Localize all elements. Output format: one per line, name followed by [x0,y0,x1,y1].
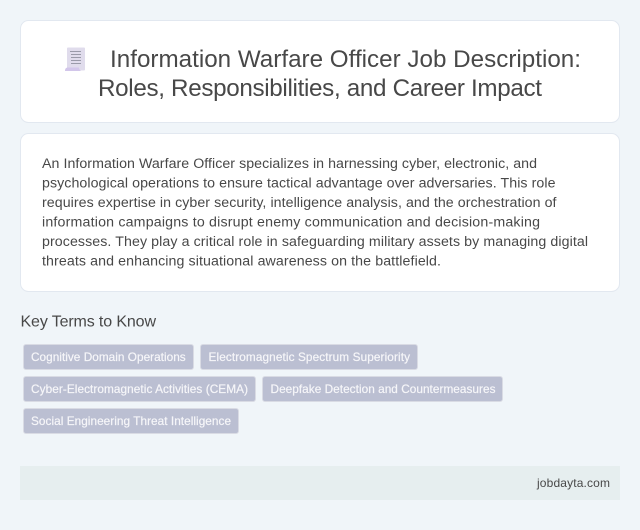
chip: electromagnetic spectrum superiority: Electromagnetic Spectrum Superiority [208,350,410,364]
heading: key terms: Key Terms to Know [20,314,156,331]
chip: cognitive domain operations [24,344,194,370]
chip: social engineering [24,408,238,434]
chip: deepfake detection: Deepfake Detection and Countermeasures [270,382,496,396]
chip: cema: Cyber-Electromagnetic Activities (CEMA) [31,382,248,396]
summary text block: information campaigns to disrupt enemy communication and decision-making [42,214,540,230]
icon: document scroll [65,48,85,71]
title line 1: Information Warfare Officer Job Description: [110,46,581,73]
panel: job summary [20,134,620,292]
chip: cema [24,376,256,402]
chip: social engineering: Social Engineering Threat Intelligence [31,414,231,428]
summary text block: psychological operations to ensure tactical advantage over adversaries. This role [42,176,556,192]
footer bar [20,466,620,500]
footer source text: jobdayta.com [536,476,610,490]
summary text block [42,156,588,270]
summary text block: An Information Warfare Officer specializes in harnessing cyber, electronic, and [42,156,537,172]
summary text block: processes. They play a critical role in safeguarding military assets by managing digital [42,234,588,250]
summary text block: threats and enhancing situational awareness on the battlefield. [42,254,441,270]
chip: electromagnetic spectrum superiority [200,344,418,370]
title line 2: Roles, Responsibilities, and Career Impact [98,75,542,102]
panel: title header [20,20,620,122]
key term chips [24,344,502,434]
summary text block: requires expertise in cyber security, intelligence analysis, and the orchestration of [42,195,557,211]
chip: cognitive domain operations: Cognitive Domain Operations [31,350,186,364]
chip: deepfake detection [262,376,502,402]
